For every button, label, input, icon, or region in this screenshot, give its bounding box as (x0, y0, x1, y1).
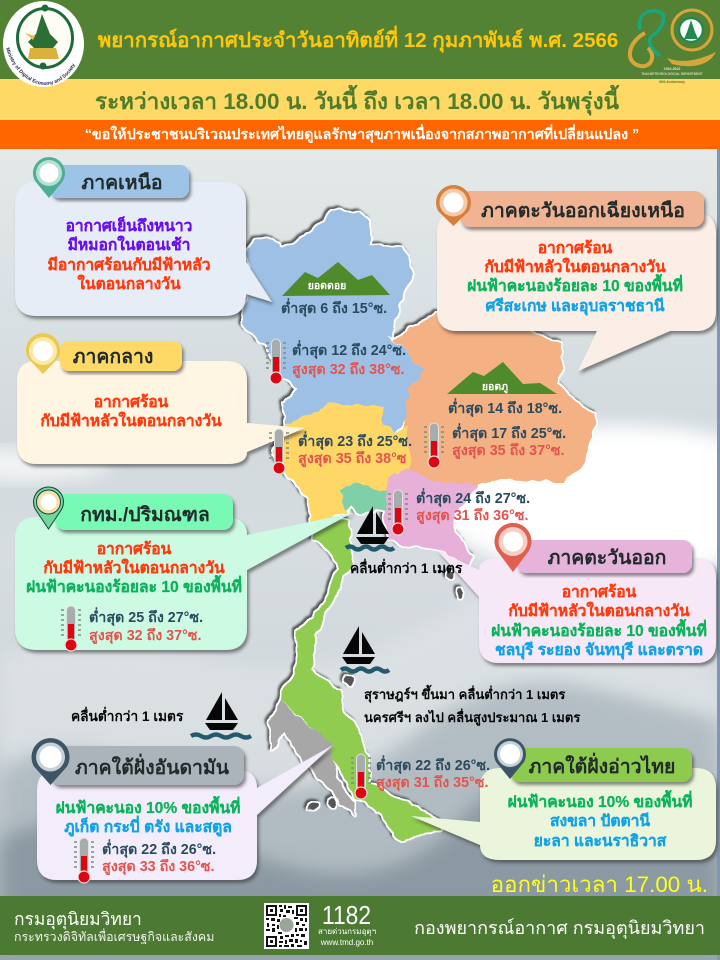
text: สงขลา ปัตตานี (550, 811, 650, 830)
temperature: south (351, 754, 490, 799)
heading (50, 165, 189, 198)
text: กับมีฟ้าหลัวในตอนกลางวัน (40, 411, 222, 430)
region: central (yellow) (273, 404, 411, 524)
department name: กรมอุตุนิยมวิทยา (14, 909, 142, 930)
callout bubble (37, 745, 333, 880)
wave label: upper gulf: คลื่นต่ำกว่า 1 เมตร (350, 558, 463, 576)
temperature: south: ต่ำสุด 22 ถึง 26°ซ. (376, 754, 490, 774)
text: ศรีสะเกษ และอุบลราชธานี (485, 296, 665, 316)
heading: ภาคใต้ฝั่งอ่าวไทย (529, 752, 675, 778)
text: ฝนฟ้าคะนองร้อยละ 10 ของพื้นที่ (467, 274, 683, 295)
temperature: สูงสุด 32 ถึง 37°ซ. (89, 627, 201, 644)
hotline: สายด่วนกรมอุตุฯ (318, 927, 376, 936)
logo: 80th anniversary: 1942-2022 (664, 67, 680, 71)
hotline (318, 900, 376, 947)
panel: south Andaman coast (32, 738, 333, 883)
QR code (264, 903, 309, 949)
temperature: north: ต่ำสุด 12 ถึง 24°ซ. (292, 339, 406, 359)
logo: 80th anniversary (630, 10, 716, 84)
icon: pin (436, 185, 471, 226)
text: มีหมอกในตอนเช้า (68, 235, 190, 254)
icon: pin (494, 523, 532, 572)
temperature: northeast: สูงสุด 35 ถึง 37°ซ. (452, 442, 564, 459)
heading (460, 191, 704, 227)
temperature: east (388, 487, 530, 535)
region: northeast (orange) (393, 313, 593, 483)
text: ฝนฟ้าคะนองร้อยละ 10 ของพื้นที่ (491, 619, 707, 640)
text: กับมีฟ้าหลัวในตอนกลางวัน (484, 257, 666, 276)
heading (60, 341, 182, 371)
icon: pin (34, 487, 63, 529)
hotline: www.tmd.go.th (320, 938, 373, 947)
wave label: gulf: นครศรีฯ ลงไป คลื่นสูงประมาณ 1 เมตร (364, 708, 580, 726)
temperature: northeast peak: ต่ำสุด 14 ถึง 18°ซ. (448, 397, 562, 417)
heading: ภาคใต้ฝั่งอันดามัน (75, 753, 230, 779)
time range band: ระหว่างเวลา 18.00 น. วันนี้ ถึง เวลา 18.00 น. วันพรุ่งนี้ (95, 84, 620, 116)
heading (50, 746, 244, 785)
icon: pin (33, 157, 65, 198)
heading: ภาคเหนือ (82, 172, 162, 194)
heading (517, 540, 692, 573)
region: south Andaman coast (gray) (270, 700, 355, 815)
text: ในตอนกลางวัน (77, 274, 181, 293)
callout bubble (17, 361, 305, 464)
text (48, 214, 210, 293)
temperature (74, 838, 216, 883)
mountain: ยอดดอย: ยอดดอย (308, 280, 346, 292)
icon: pin (494, 738, 526, 779)
text: ฝนฟ้าคะนอง 10% ของพื้นที่ (508, 790, 692, 811)
wave label: gulf: สุราษฎร์ฯ ขึ้นมา คลื่นต่ำกว่า 1 เมตร (364, 684, 565, 703)
region: Bangkok and vicinity (mint) (340, 483, 387, 513)
mountain: ยอดภู (447, 362, 557, 394)
forecast division: กองพยากรณ์อากาศ กรมอุตุนิยมวิทยา (414, 918, 705, 939)
panel: Bangkok and vicinity (15, 487, 352, 651)
boat: andaman (191, 692, 251, 738)
text: กับมีฟ้าหลัวในตอนกลางวัน (43, 558, 225, 577)
heading: กทม./ปริมณฑล (80, 504, 210, 526)
text: อากาศร้อน (94, 393, 169, 411)
temperature: ต่ำสุด 25 ถึง 27°ซ. (89, 606, 203, 626)
temperature: central (269, 429, 412, 474)
temperature: east: สูงสุด 31 ถึง 36°ซ. (416, 507, 528, 524)
logo: Ministry emblem: Ministry of Digital Economy and Society (6, 47, 76, 86)
temperature: northeast (424, 422, 566, 468)
text (26, 540, 242, 596)
title: พยากรณ์อากาศประจำวันอาทิตย์ที่ 12 กุมภาพันธ์ พ.ศ. 2566 (98, 25, 618, 53)
text (491, 583, 707, 660)
callout bubble (15, 513, 352, 650)
region: north (blue) (243, 208, 423, 433)
icon: pin (32, 738, 69, 785)
panel: central (17, 333, 305, 464)
text: ฝนฟ้าคะนอง 10% ของพื้นที่ (56, 796, 240, 817)
temperature: north peak: ต่ำสุด 6 ถึง 15°ซ. (281, 297, 387, 317)
heading: ภาคตะวันออกเฉียงเหนือ (481, 200, 685, 222)
logo: 80th anniversary: THAI METEOROLOGICAL DEPARTMENT (641, 72, 703, 76)
text: กับมีฟ้าหลัวในตอนกลางวัน (508, 601, 690, 620)
text: ชลบุรี ระยอง จันทบุรี และตราด (495, 640, 703, 660)
heading: ภาคกลาง (73, 346, 153, 368)
time range band (0, 79, 720, 120)
text: ยะลา และนราธิวาส (534, 832, 667, 850)
text (508, 790, 692, 850)
heading (55, 494, 233, 530)
logo: 80th anniversary: 80th Anniversary (659, 80, 685, 84)
boat: gulf of Thailand (341, 626, 389, 672)
text: ภูเก็ต กระบี่ ตรัง และสตูล (64, 815, 232, 838)
panel: north (15, 157, 272, 316)
temperature: south: สูงสุด 31 ถึง 35°ซ. (376, 774, 488, 791)
wave label: gulf (364, 684, 580, 726)
advisory band: “ขอให้ประชาชนบริเวณประเทศไทยดูแลรักษาสุขภาพเนื่องจากสภาพอากาศที่เปลี่ยนแปลง ” (85, 123, 639, 143)
panel: east (437, 523, 716, 663)
temperature: central: สูงสุด 35 ถึง 38°ซ (298, 450, 407, 467)
panel: south Gulf coast (411, 738, 716, 860)
heading: ภาคตะวันออก (548, 547, 666, 569)
temperature: central: ต่ำสุด 23 ถึง 25°ซ. (298, 430, 412, 450)
temperature: สูงสุด 33 ถึง 36°ซ. (102, 858, 214, 875)
issued time: ออกข่าวเวลา 17.00 น. (491, 872, 708, 897)
footer bar (0, 896, 720, 955)
region: south gulf coast (green) (280, 520, 445, 840)
mountain: ยอดภู: ยอดภู (482, 381, 508, 394)
advisory band (0, 120, 720, 149)
temperature: north (266, 339, 406, 384)
text (56, 796, 240, 838)
callout bubble (411, 768, 716, 860)
islands (309, 572, 464, 810)
text: ฝนฟ้าคะนองร้อยละ 10 ของพื้นที่ (26, 575, 242, 596)
temperature: north: สูงสุด 32 ถึง 38°ซ. (292, 361, 404, 378)
text (40, 393, 222, 430)
text (467, 239, 683, 316)
mountain: ยอดดอย (282, 262, 390, 296)
text: อากาศร้อน (97, 540, 172, 558)
callout bubble (437, 213, 716, 371)
map of Thailand (243, 208, 593, 840)
hotline: 1182 (322, 900, 371, 930)
ministry name: กระทรวงดิจิทัลเพื่อเศรษฐกิจและสังคม (14, 928, 214, 944)
callout bubble (437, 550, 716, 663)
icon: pin (26, 333, 60, 374)
region: east (pink) (384, 470, 477, 567)
text: อากาศร้อน (562, 583, 637, 601)
temperature: northeast: ต่ำสุด 17 ถึง 25°ซ. (452, 422, 566, 442)
callout bubble (15, 182, 272, 316)
temperature: east: ต่ำสุด 24 ถึง 27°ซ. (416, 487, 530, 507)
text: มีอากาศร้อนกับมีฟ้าหลัว (48, 255, 210, 274)
logo: Ministry emblem (3, 1, 84, 87)
text: อากาศร้อน (538, 239, 613, 257)
temperature: ต่ำสุด 22 ถึง 26°ซ. (102, 838, 216, 858)
text: อากาศเย็นถึงหนาว (66, 214, 192, 235)
header bar (0, 0, 720, 79)
wave label: andaman: คลื่นต่ำกว่า 1 เมตร (71, 706, 184, 724)
temperature (61, 606, 203, 651)
heading (510, 748, 692, 782)
boat: upper gulf (346, 506, 394, 550)
panel: northeast (436, 185, 716, 371)
